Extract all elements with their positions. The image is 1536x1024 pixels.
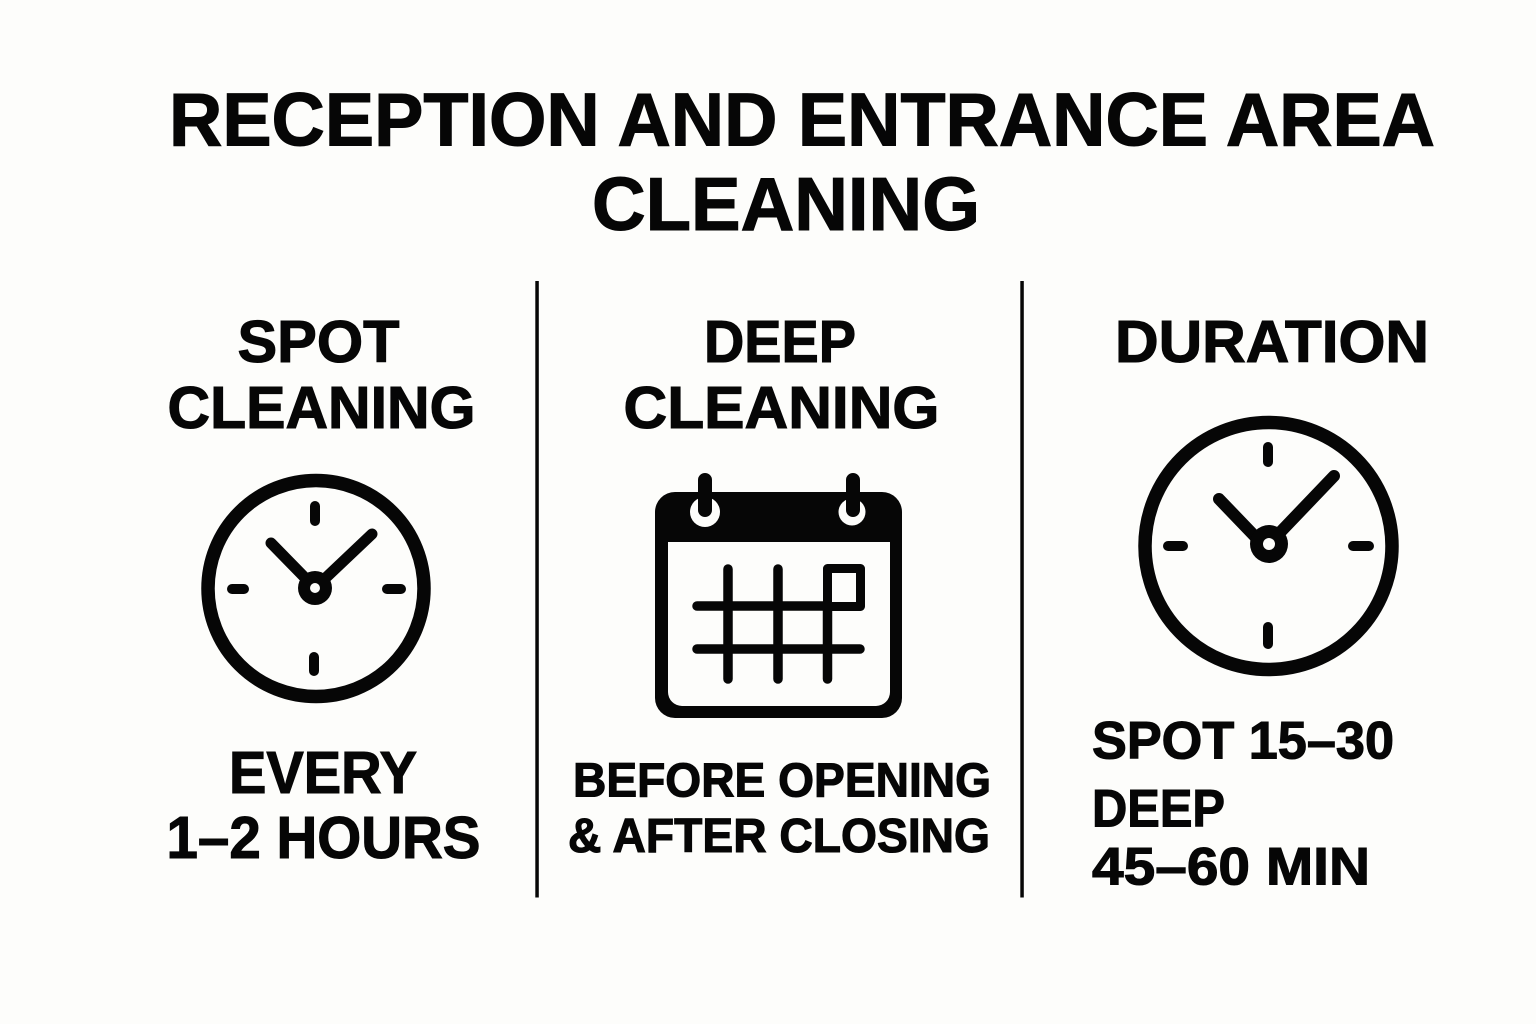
divider left	[535, 281, 539, 898]
title: RECEPTION AND ENTRANCE AREA	[169, 78, 1435, 162]
text: before opening and after closing: BEFORE OPENING	[573, 754, 991, 808]
heading: deep cleaning: CLEANING	[624, 375, 940, 441]
heading: spot cleaning: CLEANING	[168, 375, 476, 441]
heading: spot cleaning	[168, 309, 476, 441]
text: duration values	[1092, 712, 1394, 896]
text: every 1-2 hours	[166, 740, 480, 871]
text: every 1-2 hours: 1–2 HOURS	[166, 805, 480, 871]
title	[169, 78, 1435, 246]
text: duration values: DEEP	[1092, 780, 1225, 838]
text: before opening and after closing: & AFTER CLOSING	[568, 810, 990, 863]
panel: deep cleaning	[568, 309, 991, 863]
text: duration values: SPOT 15–30	[1092, 712, 1394, 770]
divider right	[1020, 281, 1024, 898]
title: CLEANING	[592, 162, 980, 246]
panel: duration	[1092, 309, 1429, 896]
heading: duration: DURATION	[1115, 309, 1429, 375]
heading: spot cleaning: SPOT	[238, 309, 400, 375]
panel: spot cleaning	[166, 309, 480, 871]
text: duration values: 45–60 MIN	[1092, 838, 1370, 896]
heading: deep cleaning	[624, 309, 940, 441]
icon: large clock	[1145, 422, 1392, 670]
text: before opening and after closing	[568, 754, 991, 863]
text: every 1-2 hours: EVERY	[229, 740, 417, 806]
icon: clock	[208, 480, 424, 696]
icon: calendar	[655, 480, 902, 718]
heading: deep cleaning: DEEP	[704, 309, 856, 375]
